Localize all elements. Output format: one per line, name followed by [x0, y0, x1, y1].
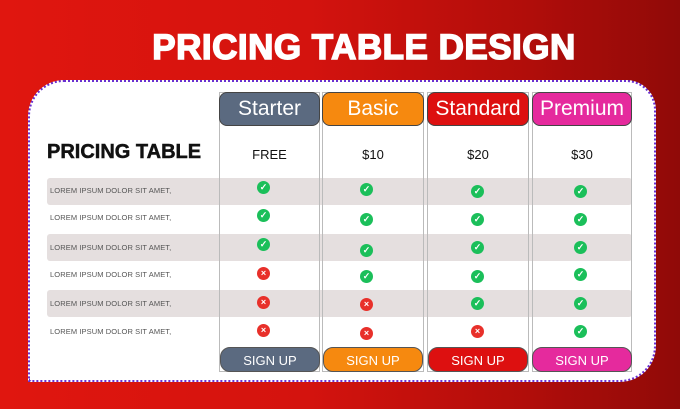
- icons: check/cross grid: ✓: [474, 298, 481, 308]
- header: premium: Premium: [540, 97, 624, 120]
- icons: check/cross grid: ✓: [577, 269, 584, 279]
- header: starter: [219, 92, 320, 126]
- feature labels: LOREM IPSUM DOLOR SIT AMET,: [50, 186, 171, 195]
- icons: check/cross grid: ✓: [363, 184, 370, 194]
- icons: check/cross grid: ✓: [474, 186, 481, 196]
- icons: check/cross grid: ✓: [577, 326, 584, 336]
- icons: check/cross grid: ✓: [260, 182, 267, 192]
- text: $10: [362, 147, 384, 162]
- icons: check/cross grid: ✓: [363, 271, 370, 281]
- icons: check/cross grid: ✓: [474, 214, 481, 224]
- header: starter: Starter: [238, 97, 301, 120]
- icons: check/cross grid: ×: [475, 326, 480, 336]
- icons: check/cross grid: [257, 181, 587, 340]
- heading: pricing table: PRICING TABLE: [47, 141, 201, 163]
- icons: check/cross grid: ×: [261, 268, 266, 278]
- feature labels: LOREM IPSUM DOLOR SIT AMET,: [50, 243, 171, 252]
- title: PRICING TABLE DESIGN: [152, 28, 576, 67]
- icons: check/cross grid: ×: [364, 328, 369, 338]
- button: standard: [428, 347, 528, 372]
- button: basic: [323, 347, 423, 372]
- button: starter: SIGN UP: [243, 353, 297, 368]
- button: premium: [532, 347, 632, 372]
- stripes: [47, 178, 632, 205]
- prices: FREE: [252, 147, 287, 162]
- feature labels: LOREM IPSUM DOLOR SIT AMET,: [50, 270, 171, 279]
- icons: check/cross grid: ✓: [363, 214, 370, 224]
- icons: check/cross grid: ✓: [260, 210, 267, 220]
- feature labels: [50, 186, 171, 336]
- header: basic: Basic: [347, 97, 399, 120]
- icons: check/cross grid: ✓: [260, 239, 267, 249]
- icons: check/cross grid: ✓: [577, 242, 584, 252]
- icons: check/cross grid: ×: [261, 297, 266, 307]
- icons: check/cross grid: ×: [364, 299, 369, 309]
- icons: check/cross grid: ✓: [577, 214, 584, 224]
- button: basic: SIGN UP: [346, 353, 400, 368]
- button: starter: [220, 347, 320, 372]
- header: standard: [427, 92, 529, 126]
- icons: check/cross grid: ✓: [363, 245, 370, 255]
- panel: pricing table: [28, 80, 656, 382]
- text: $20: [467, 147, 489, 162]
- feature labels: LOREM IPSUM DOLOR SIT AMET,: [50, 327, 171, 336]
- header: standard: Standard: [435, 97, 521, 120]
- feature labels: LOREM IPSUM DOLOR SIT AMET,: [50, 213, 171, 222]
- feature labels: LOREM IPSUM DOLOR SIT AMET,: [50, 299, 171, 308]
- icons: check/cross grid: ✓: [474, 242, 481, 252]
- icons: check/cross grid: ✓: [577, 186, 584, 196]
- header: premium: [532, 92, 632, 126]
- button: standard: SIGN UP: [451, 353, 505, 368]
- icons: check/cross grid: ×: [261, 325, 266, 335]
- button: premium: SIGN UP: [555, 353, 609, 368]
- icons: check/cross grid: ✓: [474, 271, 481, 281]
- header: basic: [322, 92, 424, 126]
- icons: check/cross grid: ✓: [577, 298, 584, 308]
- text: $30: [571, 147, 593, 162]
- column borders: [219, 92, 320, 372]
